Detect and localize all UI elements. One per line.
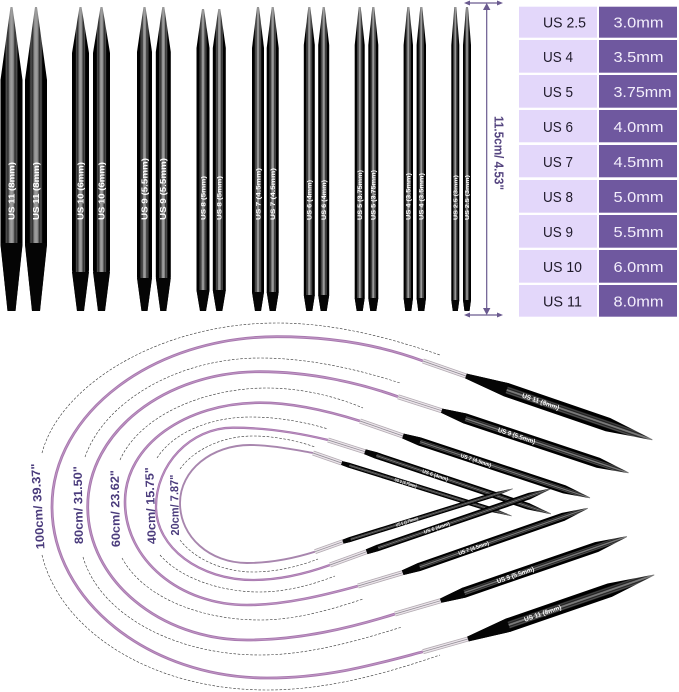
row: US 8: US 8 <box>543 189 573 206</box>
needle pair: US 6 (4mm) <box>304 7 329 311</box>
needle: US 5 left <box>355 7 365 311</box>
needle: US 10 left <box>72 7 89 311</box>
needle: US 8 left <box>196 9 210 311</box>
dimension label: 11.5cm / 4.53 in: 11.5cm/ 4.53" <box>492 116 506 190</box>
needle: US 9 right <box>156 7 171 311</box>
row: US 6 <box>519 110 677 142</box>
tip: US 11 upper <box>464 369 655 446</box>
needle: US 11 left <box>0 7 22 311</box>
tip: US 11 lower: US 11 (8mm) <box>523 604 563 624</box>
needle: US 8 right <box>213 9 226 311</box>
label: 40cm: 40cm/ 15.75" <box>142 467 159 544</box>
needle: US 6 left <box>304 7 315 311</box>
cable: 100cm <box>52 337 423 678</box>
row: US 6: US 6 <box>543 119 573 136</box>
row: US 7: 4.5mm <box>614 154 664 171</box>
needle: US 4 left: US 4 (3.5mm) <box>406 173 412 220</box>
row: US 4 <box>519 40 677 73</box>
needle: US 4 right <box>417 7 426 311</box>
needle: US 9 right: US 9 (5.5mm) <box>159 158 168 220</box>
tip: US 7 lower <box>401 504 589 577</box>
needle: US 5 right: US 5 (3.75mm) <box>371 170 377 220</box>
needle: US 5 left: US 5 (3.75mm) <box>358 170 364 220</box>
row: US 7 <box>519 145 677 177</box>
row: US 10: US 10 <box>543 259 582 276</box>
tip: US 6 upper: US 6 (4mm) <box>421 469 449 483</box>
cable: 40cm <box>156 428 330 580</box>
tip: US 6 lower <box>366 486 552 555</box>
label: 60cm: 60cm/ 23.62" <box>108 470 123 547</box>
label: 100cm: 100cm/ 39.37" <box>28 463 47 550</box>
cable connectors <box>313 361 468 652</box>
tip: US 6 upper <box>364 449 552 517</box>
needle: US 2.5 right <box>463 7 471 311</box>
needle: US 8 left: US 8 (5mm) <box>200 176 207 220</box>
tip: US 7 upper: US 7 (4.5mm) <box>460 453 492 469</box>
needle: US 10 right <box>93 7 110 311</box>
tip: US 9 lower: US 9 (5.5mm) <box>496 566 535 585</box>
row: US 2.5 <box>519 7 677 38</box>
tip: US 7 lower: US 7 (4.5mm) <box>458 541 490 557</box>
row: US 11: US 11 <box>543 294 582 310</box>
needle pair: US 2.5 (3mm) <box>451 7 471 311</box>
needle pair: US 5 (3.75mm) <box>355 7 378 311</box>
label: 80cm: 80cm/ 31.50" <box>71 466 86 544</box>
needle: US 7 left: US 7 (4.5mm) <box>255 168 262 220</box>
needle: US 6 right: US 6 (4mm) <box>322 180 328 220</box>
dimension arrow: needle length <box>464 0 503 318</box>
row: US 4: 3.5mm <box>614 49 664 66</box>
needle: US 11 left: US 11 (8mm) <box>6 162 16 220</box>
cable length labels <box>28 463 182 550</box>
row: US 8: 5.0mm <box>614 189 664 206</box>
needle: US 5 right <box>368 7 378 311</box>
cable: 60cm <box>125 403 360 605</box>
row: US 11: 8.0mm <box>614 294 664 310</box>
needle: US 2.5 right: US 2.5 (3mm) <box>465 175 471 220</box>
needle pair: US 8 (5mm) <box>196 9 226 311</box>
row: US 9 <box>519 215 677 248</box>
cable: 20cm <box>180 445 315 563</box>
label: 20cm: 20cm/ 7.87" <box>169 474 182 536</box>
tip: US 5 upper: US 5 (3.75mm) <box>394 477 418 489</box>
tip: US 11 upper: US 11 (8mm) <box>521 393 560 412</box>
tip: US 9 upper: US 9 (5.5mm) <box>497 427 536 446</box>
tip: US 9 lower <box>439 532 629 606</box>
tip: US 5 lower: US 5 (3.75mm) <box>395 516 419 528</box>
needle pair: US 10 (6mm) <box>72 7 110 311</box>
needle pair: US 7 (4.5mm) <box>252 7 279 311</box>
row: US 10 <box>519 250 677 283</box>
tip: US 9 upper <box>440 406 630 478</box>
needle: US 7 right: US 7 (4.5mm) <box>270 168 277 220</box>
needle: US 6 right <box>318 7 329 311</box>
needle: US 2.5 left <box>451 7 459 311</box>
row: US 9: US 9 <box>543 224 573 241</box>
tip: US 7 upper <box>402 432 591 502</box>
tip: US 6 lower: US 6 (4mm) <box>423 521 451 536</box>
row: US 9: 5.5mm <box>614 224 664 241</box>
needle: US 9 left <box>137 7 152 311</box>
tip: US 11 lower <box>466 568 657 646</box>
needle: US 10 left: US 10 (6mm) <box>76 162 85 220</box>
dashed length guides <box>42 323 440 690</box>
needle: US 7 right <box>267 7 279 311</box>
needle: US 2.5 left: US 2.5 (3mm) <box>453 175 459 220</box>
row: US 5: US 5 <box>543 84 573 101</box>
tip: US 5 upper <box>341 461 512 518</box>
row: US 4: US 4 <box>543 49 573 66</box>
size conversion table <box>519 7 677 317</box>
needle pair: US 4 (3.5mm) <box>404 7 426 311</box>
row: US 7: US 7 <box>543 154 573 171</box>
needle: US 8 right: US 8 (5mm) <box>217 176 224 220</box>
needle: US 4 right: US 4 (3.5mm) <box>419 173 425 220</box>
needle: US 10 right: US 10 (6mm) <box>97 162 106 220</box>
needle pair: US 9 (5.5mm) <box>137 7 171 311</box>
needle: US 11 right: US 11 (8mm) <box>31 162 41 220</box>
row: US 5: 3.75mm <box>614 84 672 101</box>
needle: US 9 left: US 9 (5.5mm) <box>140 158 149 220</box>
needle: US 11 right <box>25 7 47 311</box>
row: US 2.5: US 2.5 <box>543 14 586 32</box>
needle: US 7 left <box>252 7 264 311</box>
needle pair: US 11 (8mm) <box>0 7 47 311</box>
row: US 5 <box>519 75 677 108</box>
cable: 80cm <box>88 372 398 640</box>
row: US 6: 4.0mm <box>614 119 664 136</box>
needle: US 4 left <box>404 7 413 311</box>
row: US 10: 6.0mm <box>614 259 664 276</box>
circular needle tips <box>341 369 657 646</box>
row: US 11 <box>519 285 677 317</box>
tip: US 5 lower <box>342 486 514 544</box>
row: US 8 <box>519 180 677 213</box>
row: US 2.5: 3.0mm <box>614 14 664 32</box>
needle: US 6 left: US 6 (4mm) <box>307 180 313 220</box>
